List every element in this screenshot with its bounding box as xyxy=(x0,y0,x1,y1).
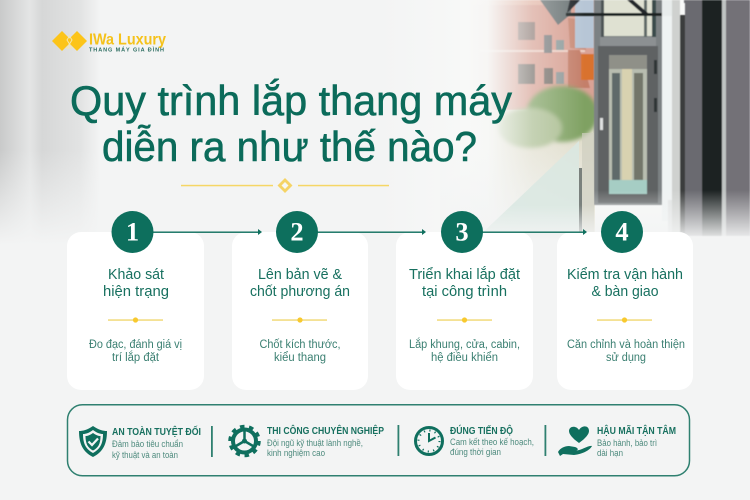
step number 3 xyxy=(441,211,483,253)
benefit 1 text: AN TOÀN TUYỆT ĐỐI xyxy=(112,424,201,438)
step 2 heading: Lên bản vẽ & xyxy=(258,267,342,283)
logo xyxy=(52,31,166,54)
benefit 1 text: kỹ thuật và an toàn xyxy=(112,450,178,460)
step number 3: 3 xyxy=(455,216,469,246)
step 1 heading: hiện trạng xyxy=(103,284,169,300)
step 4 description: Căn chỉnh và hoàn thiện xyxy=(567,339,685,351)
benefit 2 text xyxy=(267,424,384,458)
arrow: step 3 to 4 xyxy=(482,229,587,235)
step 1 separator xyxy=(108,317,163,323)
step number 2: 2 xyxy=(290,216,304,246)
step number 4 xyxy=(601,211,643,253)
panel: step 4 xyxy=(557,232,693,390)
panel: benefits xyxy=(68,405,690,476)
benefit 3 text: đúng thời gian xyxy=(450,447,501,457)
benefit 3 text xyxy=(450,424,534,457)
title xyxy=(70,77,512,170)
title divider xyxy=(181,178,389,193)
step 4 description xyxy=(567,339,685,364)
step 3 heading: Triển khai lắp đặt xyxy=(409,266,520,283)
step 1 description: trí lắp đặt xyxy=(112,351,160,364)
step number 2 xyxy=(276,211,318,253)
panel: step 1 xyxy=(67,232,204,390)
left faded photo xyxy=(0,0,100,245)
step 1 description xyxy=(89,339,182,364)
icon: gear xyxy=(230,426,259,456)
logo tagline: THANG MÁY GIA ĐÌNH xyxy=(89,46,164,54)
benefit 4 text: dài hạn xyxy=(597,448,623,458)
step 3 heading xyxy=(409,266,520,300)
benefit 4 text: Bảo hành, bảo trì xyxy=(597,438,657,448)
step 3 separator xyxy=(437,317,492,323)
arrow: step 1 to 2 xyxy=(152,229,262,235)
step 4 heading xyxy=(567,267,683,300)
icon: clock xyxy=(416,428,442,454)
icon: logo diamonds xyxy=(52,31,87,51)
step 1 heading: Khảo sát xyxy=(108,267,164,283)
step 2 heading: chốt phương án xyxy=(250,284,350,300)
step 4 description: sử dụng xyxy=(606,352,646,364)
arrow: step 2 to 3 xyxy=(317,229,426,235)
benefit 4 text: HẬU MÃI TẬN TÂM xyxy=(597,424,676,437)
title: diễn ra như thế nào? xyxy=(102,123,477,170)
step 3 description xyxy=(409,338,520,364)
step 2 heading xyxy=(250,267,350,300)
step number 1: 1 xyxy=(126,216,139,246)
step 3 description: Lắp khung, cửa, cabin, xyxy=(409,338,520,351)
step 1 description: Đo đạc, đánh giá vị xyxy=(89,339,182,351)
step 2 description xyxy=(260,339,340,364)
title: Quy trình lắp thang máy xyxy=(70,77,512,124)
benefit 2 text: THI CÔNG CHUYÊN NGHIỆP xyxy=(267,424,384,437)
step 2 separator xyxy=(272,317,327,323)
benefit 2 text: kinh nghiệm cao xyxy=(267,448,325,458)
step 3 heading: tại công trình xyxy=(422,284,507,300)
step 3 description: hệ điều khiển xyxy=(431,352,498,364)
step 1 heading xyxy=(103,267,169,300)
photo: elevator and building xyxy=(380,0,750,241)
panel: step 3 xyxy=(396,232,533,390)
benefit 1 text: Đảm bảo tiêu chuẩn xyxy=(112,439,183,449)
benefit 3 text: Cam kết theo kế hoạch, xyxy=(450,437,534,447)
step 2 description: Chốt kích thước, xyxy=(260,339,340,351)
step 4 heading: Kiểm tra vận hành xyxy=(567,267,683,283)
benefit 4 text xyxy=(597,424,676,458)
icon: heart in hand xyxy=(558,426,592,456)
step number 1 xyxy=(112,211,154,253)
step 2 description: kiểu thang xyxy=(274,352,326,364)
benefit 1 text xyxy=(112,424,201,460)
step number 4: 4 xyxy=(615,216,629,246)
panel: step 2 xyxy=(232,232,368,390)
logo name: IWa Luxury xyxy=(89,32,166,48)
step 4 heading: & bàn giao xyxy=(592,284,658,300)
benefit 2 text: Đội ngũ kỹ thuật lành nghề, xyxy=(267,438,363,448)
benefit 3 text: ĐÚNG TIẾN ĐỘ xyxy=(450,424,513,437)
step 4 separator xyxy=(597,317,652,323)
icon: shield xyxy=(79,426,107,457)
